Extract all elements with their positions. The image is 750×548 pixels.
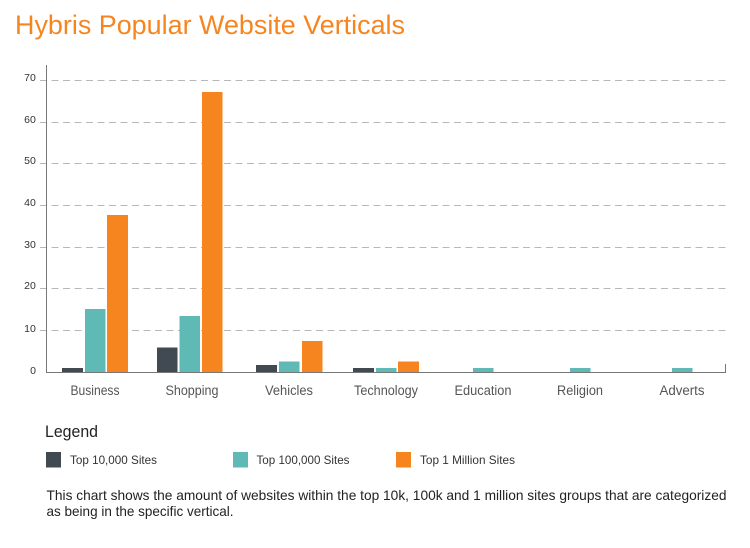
legend heading: Legend [45,422,98,441]
y axis: 20 [24,280,36,292]
bars: Business [62,215,128,372]
y axis: 10 [24,323,36,335]
y axis [24,65,46,377]
bars: Shopping [157,92,222,372]
description text: as being in the specific vertical. [46,503,234,519]
y axis: 50 [24,155,36,167]
x axis labels: Religion [557,383,603,398]
y axis: 30 [24,239,36,251]
legend item: Top 10,000 Sites [46,452,157,468]
description text: This chart shows the amount of websites within the top 10k, 100k and 1 million sites groups that are categorized [46,487,726,503]
x axis labels: Vehicles [265,383,313,398]
x axis [46,364,726,372]
legend item: Top 100,000 Sites: Top 100,000 Sites [256,453,350,467]
legend item: Top 1 Million Sites: Top 1 Million Sites [420,453,515,467]
bars: Technology [353,362,419,372]
bar: Adverts [672,368,692,372]
y axis: 70 [24,72,36,84]
chart: website verticals bar chart [24,65,726,398]
y axis: 60 [24,114,36,126]
legend [45,422,515,468]
x axis labels: Business [70,383,120,398]
y axis: 0 [30,365,36,377]
bars: Vehicles [256,341,322,372]
y axis: 40 [24,197,36,209]
x axis labels [70,383,705,398]
x axis labels: Education [454,383,512,398]
description text [46,487,726,519]
x axis labels: Adverts [660,383,705,398]
x axis labels: Shopping [166,383,218,398]
bar: Religion [570,368,590,372]
title: Hybris Popular Website Verticals [15,10,405,40]
x axis labels: Technology [354,383,418,398]
bar: Education [473,368,494,372]
legend item: Top 10,000 Sites: Top 10,000 Sites [70,453,157,467]
